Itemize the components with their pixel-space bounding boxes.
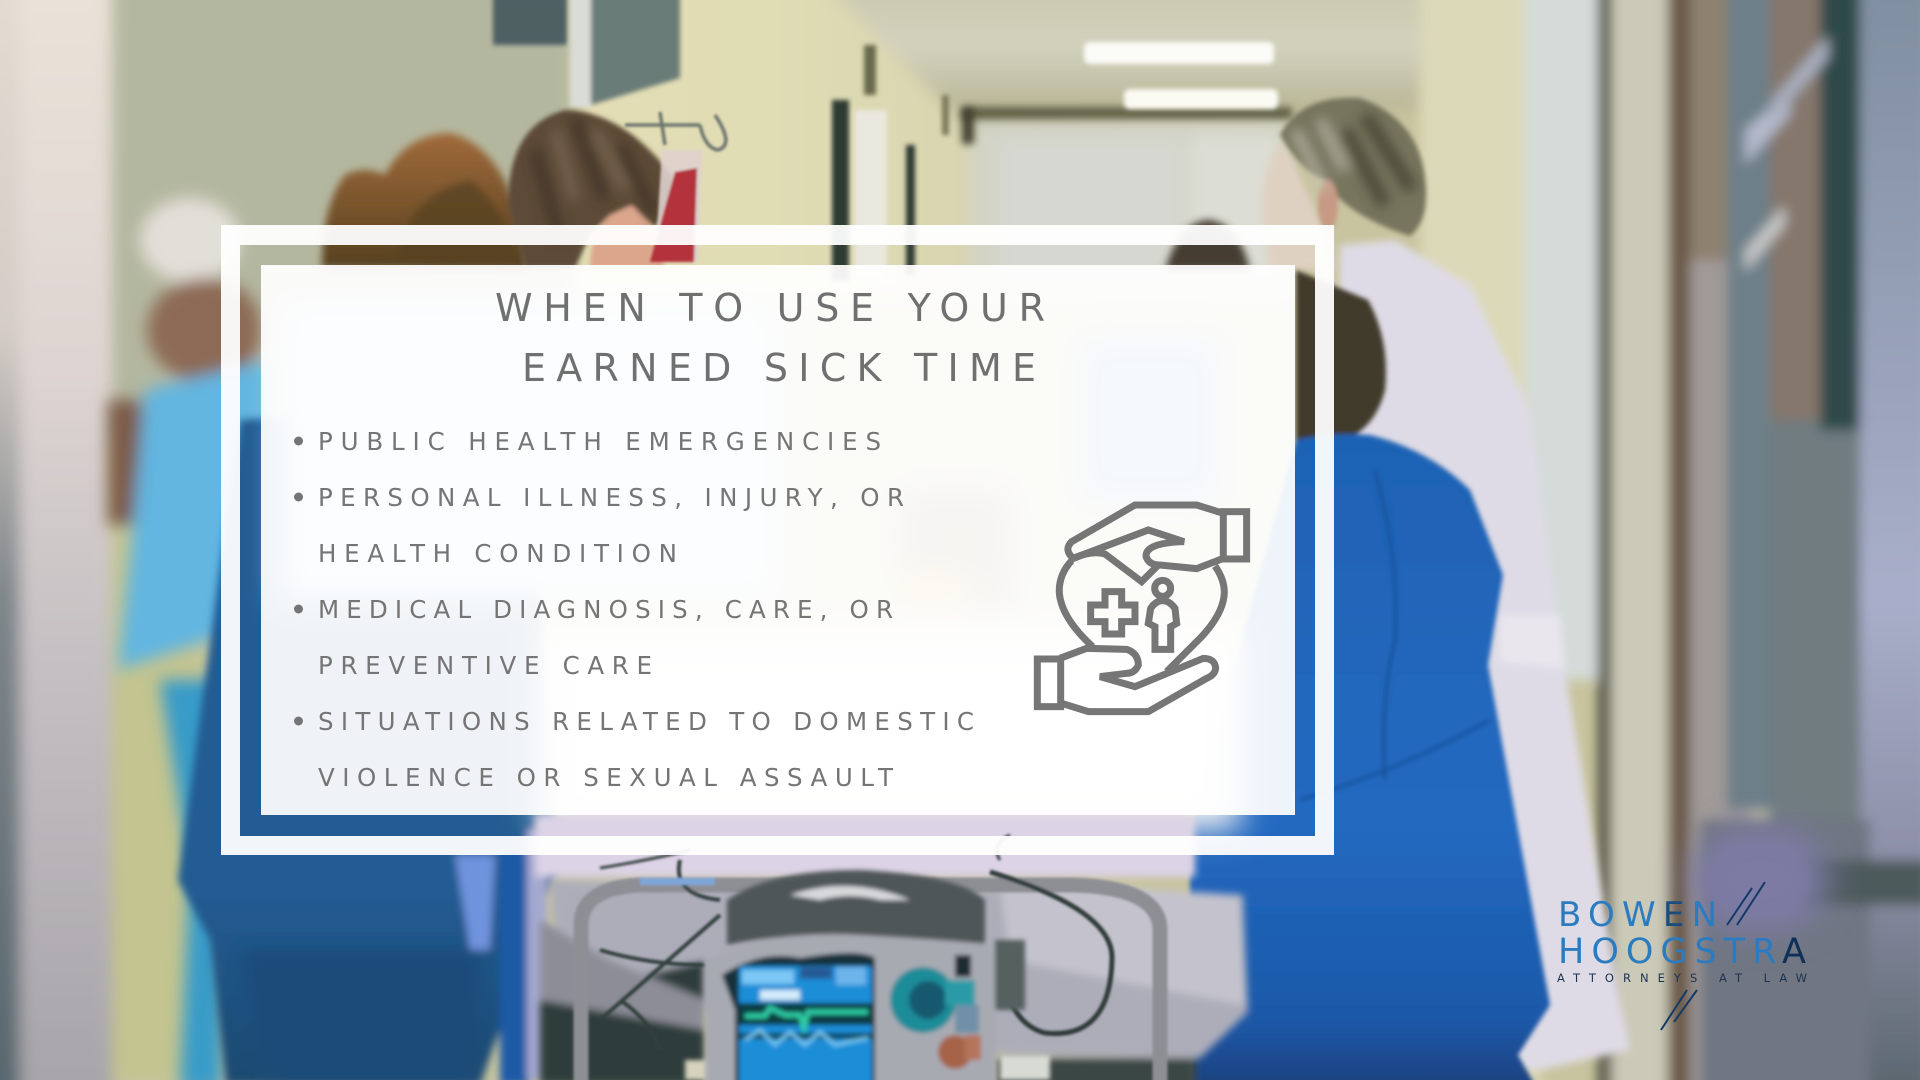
defibrillator monitor: [685, 870, 1050, 1080]
IV bag and hooks: [625, 112, 726, 262]
list item: medical care: [294, 595, 893, 680]
bullet list: [294, 427, 974, 792]
top hand: [1068, 505, 1223, 569]
list item: medical care: PREVENTIVE CARE: [318, 651, 652, 680]
doctor with dark hair: [508, 110, 682, 268]
list item: personal illness: HEALTH CONDITION: [318, 539, 677, 568]
logo wordmark: ATTORNEYS AT LAW: [1557, 971, 1807, 985]
gurney rail and cables: [581, 835, 1160, 1080]
heading: WHEN TO USE YOUR: [495, 286, 1045, 330]
heading: EARNED SICK TIME: [522, 346, 1036, 390]
blurred nurse in teal at left: [108, 198, 270, 1080]
corridor wall details: [493, 0, 949, 280]
icon: hands protecting heart with cross and person: [1037, 505, 1247, 712]
logo: Bowen Hoogstra Attorneys at Law: [1557, 882, 1807, 1030]
list item: personal illness: PERSONAL ILLNESS, INJURY, OR: [318, 483, 904, 512]
list item: personal illness: [294, 483, 904, 568]
translucent white frame: [221, 225, 1334, 855]
logo wordmark: BOWEN: [1558, 895, 1717, 935]
list item: public health emergencies: PUBLIC HEALTH EMERGENCIES: [318, 427, 881, 456]
doctor's hair texture: [535, 118, 655, 240]
list item: domestic violence: VIOLENCE OR SEXUAL ASSAULT: [318, 763, 894, 792]
lavender reflection at lower right: [1690, 825, 1830, 935]
man in white coat: [1165, 140, 1630, 1070]
nurse with red-brown hair: [322, 133, 528, 270]
list item: domestic violence: SITUATIONS RELATED TO DOMESTIC: [318, 707, 974, 736]
person: [1155, 580, 1171, 596]
patient on gurney, seen through panel: [280, 300, 1240, 830]
man's hair texture: [1295, 115, 1412, 205]
gurney sheet: [535, 815, 1248, 1080]
left pillar: [0, 0, 112, 1080]
list item: medical care: MEDICAL DIAGNOSIS, CARE, OR: [318, 595, 893, 624]
nurse in bright blue scrubs with dark hair: [1190, 270, 1550, 1080]
logo slashes: [1661, 882, 1765, 1030]
bottom hand: [1060, 648, 1216, 712]
translucent white content panel: [261, 265, 1295, 815]
nurse in dark blue scrubs at left: [178, 400, 560, 1080]
logo wordmark: [1557, 895, 1807, 985]
heading: [495, 286, 1045, 390]
right side wall panels: [1420, 0, 1920, 1080]
ceiling lights and corridor end: [962, 42, 1292, 144]
list item: domestic violence: [294, 707, 974, 792]
man's hair and ear: [1280, 98, 1426, 236]
medical cross: [1091, 592, 1135, 634]
heart: [1059, 553, 1224, 672]
logo wordmark: HOOGSTRA: [1558, 932, 1806, 972]
